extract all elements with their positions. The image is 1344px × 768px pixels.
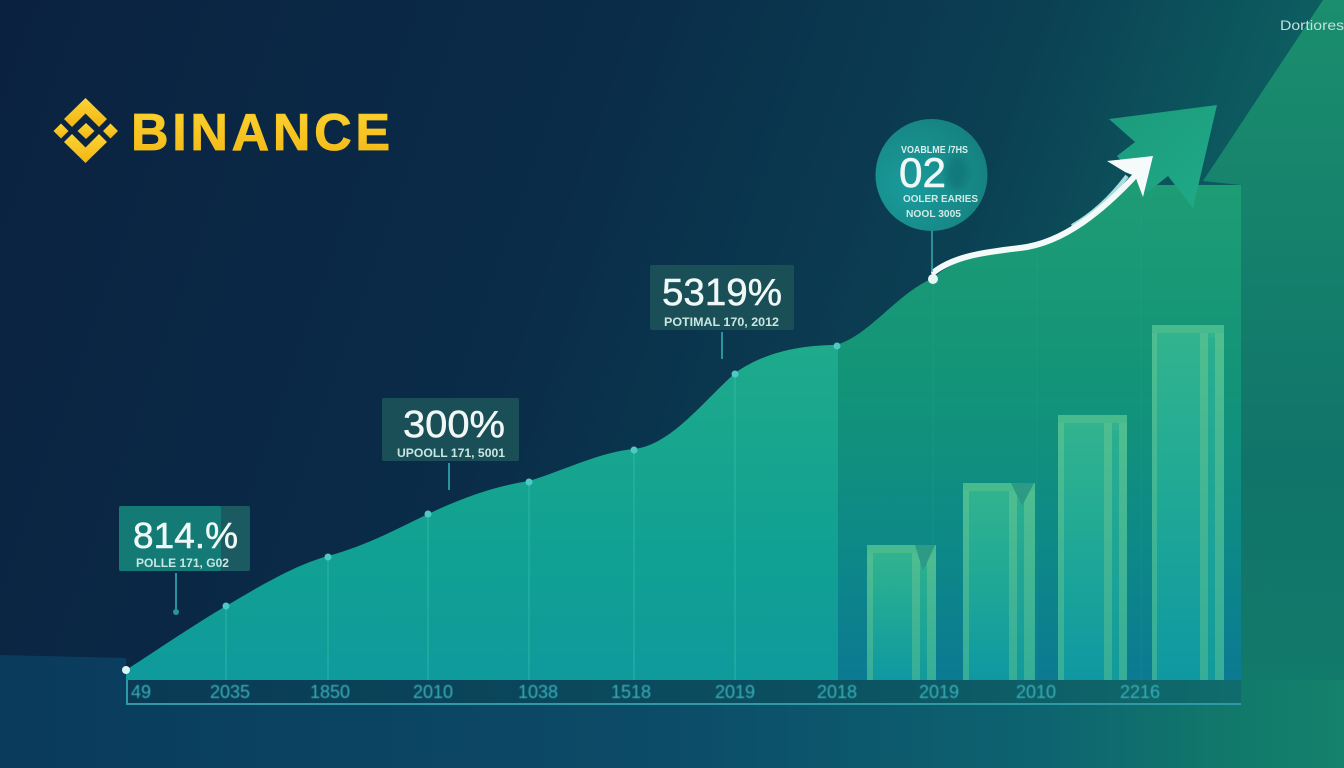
callout box highlight: [119, 506, 221, 571]
start point: [122, 666, 130, 674]
circle top caption: VOABLME /7HS: [901, 145, 968, 156]
axis band: [126, 680, 1241, 703]
callout caption: UPOOLL 171, 5001: [397, 448, 506, 460]
callout caption: POLLE 171, G02: [136, 558, 229, 570]
callout box: [382, 398, 519, 461]
bar chart: [867, 325, 1224, 680]
data points: [222, 342, 840, 610]
axis labels: 49: [131, 682, 151, 702]
area chart: [122, 180, 1241, 680]
callout box: [119, 506, 250, 571]
wordmark: BINANCE: [131, 104, 390, 162]
background lower band: [0, 655, 1344, 768]
drop lines: [226, 185, 1141, 680]
axis labels: 2010: [1016, 682, 1056, 702]
callout box: [650, 265, 794, 330]
axis labels: 2018: [817, 682, 857, 702]
right area behind bars: [836, 180, 1241, 680]
arrow head: [1107, 156, 1153, 197]
axis labels: 2216: [1120, 682, 1160, 702]
circle caption line 2: NOOL 3005: [906, 208, 961, 220]
callout leader: [448, 463, 450, 490]
circle value: 02: [899, 149, 946, 196]
white trend arrow: [928, 156, 1153, 284]
top right small label: Dortiores: [1280, 17, 1344, 33]
circle inner shade: [946, 156, 968, 190]
end point: [928, 274, 938, 284]
arrow shaft: [934, 176, 1135, 272]
callout caption: POTIMAL 170, 2012: [664, 317, 779, 329]
axis labels: 2019: [919, 682, 959, 702]
bar 2: [963, 483, 1035, 680]
callout: 300%: [382, 398, 519, 490]
background right light wedge: [1203, 0, 1344, 768]
axis labels: [131, 682, 1160, 702]
callout value: 5319%: [662, 272, 782, 314]
circle: [876, 119, 988, 231]
callout: 814.%: [119, 506, 250, 615]
callout value: 300%: [403, 404, 505, 446]
bar 1: [867, 545, 936, 680]
callout value: 814.%: [133, 515, 238, 556]
callout: 5319%: [650, 265, 794, 359]
big green arrow: [1109, 105, 1217, 208]
leader dot: [173, 609, 179, 615]
logo: Binance: [54, 98, 390, 163]
bar 3: [1058, 415, 1127, 680]
axis labels: 2010: [413, 682, 453, 702]
axis labels: 1850: [310, 682, 350, 702]
x axis: [126, 680, 1241, 704]
leader line: [931, 230, 933, 272]
axis labels: 2019: [715, 682, 755, 702]
left area: [126, 345, 838, 680]
callout leader: [175, 573, 177, 612]
axis labels: 1038: [518, 682, 558, 702]
icon: Binance diamond: [54, 98, 118, 163]
axis line: [127, 680, 1241, 704]
axis labels: 1518: [611, 682, 651, 702]
bar 4: [1152, 325, 1224, 680]
callout: circle 02: [876, 119, 988, 272]
callout leader: [721, 332, 723, 359]
arrow shaft highlight: [1072, 176, 1127, 226]
axis labels: 2035: [210, 682, 250, 702]
circle caption line 1: OOLER EARIES: [903, 193, 978, 205]
